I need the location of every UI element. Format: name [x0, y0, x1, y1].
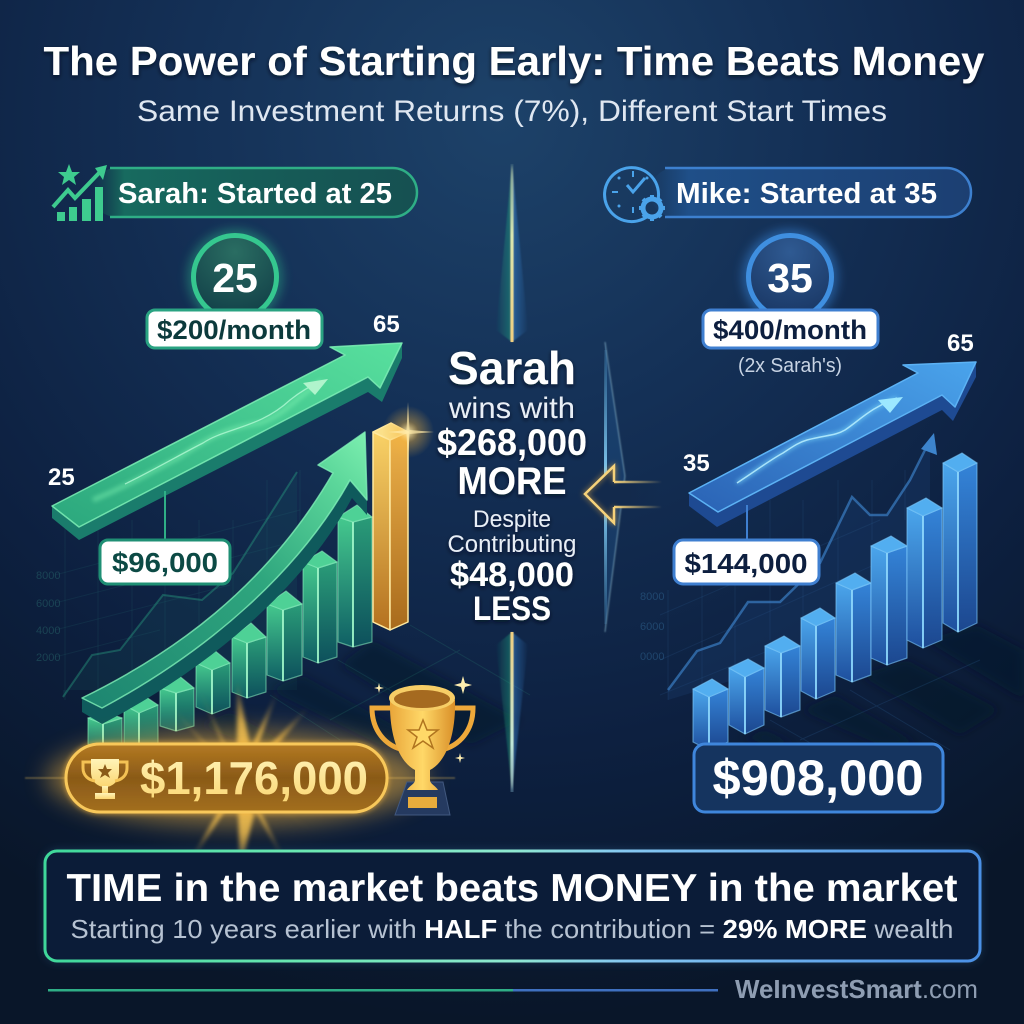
- panel: verdict text: $268,000: [437, 422, 587, 463]
- panel: verdict text: [437, 342, 587, 628]
- age labels on Sarah arrow: [48, 311, 400, 491]
- icon: growth chart with star: [53, 164, 107, 221]
- panel: verdict text: Contributing: [448, 531, 576, 558]
- age labels on Mike arrow: 65: [947, 330, 974, 357]
- panel: verdict text: $48,000: [450, 556, 574, 594]
- Sarah header pill: [92, 168, 417, 217]
- label: $96,000 contributed: [100, 491, 230, 584]
- note: 2x Sarah's: (2x Sarah's): [738, 355, 842, 377]
- label: $200/month: $200/month: [157, 315, 311, 345]
- callout: key takeaway: [45, 851, 980, 961]
- chart: Mike faint line and grid: [640, 433, 937, 700]
- badge: age 25: [187, 229, 283, 325]
- energy wave on green arrow: [93, 379, 328, 500]
- label: $144,000 contributed: [674, 505, 819, 584]
- title: The Power of Starting Early: Time Beats Money: [44, 38, 985, 84]
- icon: clock with gear: [605, 168, 665, 222]
- sunburst: [25, 680, 455, 870]
- gold bar: [373, 423, 408, 630]
- callout: key takeaway: Starting 10 years earlier with HALF the contribution = 29% MORE wealth: [70, 914, 954, 944]
- total: $908,000: $908,000: [712, 750, 924, 806]
- panel: verdict text: wins with: [448, 392, 575, 425]
- label: $96,000 contributed: $96,000: [112, 547, 218, 578]
- chart: Sarah faint line and grid: 4000: [36, 625, 60, 637]
- Mike header pill: [650, 168, 971, 217]
- floor shadow and grid: [740, 625, 1024, 760]
- age labels on Sarah arrow: 65: [373, 311, 400, 338]
- gold bar flare: [382, 402, 434, 462]
- panel: Mike: [605, 168, 1024, 812]
- age labels on Mike arrow: [683, 330, 974, 477]
- label: $144,000 contributed: $144,000: [684, 548, 808, 579]
- chart: Sarah faint line and grid: [36, 470, 300, 700]
- subtitle: Same Investment Returns (7%), Different Start Times: [137, 95, 887, 128]
- bar chart: Sarah's growth bars: [88, 505, 372, 752]
- footer rule: [48, 989, 718, 992]
- label: $200/month: [147, 310, 322, 348]
- badge: age 35: [742, 229, 838, 325]
- chart: Sarah faint line and grid: 2000: [36, 652, 60, 664]
- arrow pointing to Sarah: [585, 342, 662, 632]
- top green arrow: [52, 343, 402, 540]
- label: $400/month: [703, 310, 878, 348]
- icon: small trophy: [83, 759, 127, 799]
- chart: Mike faint line and grid: 0000: [640, 651, 664, 663]
- icon: gold trophy: [372, 676, 473, 815]
- curved green growth arrow: [82, 432, 367, 724]
- chart: Mike faint line and grid: 8000: [640, 591, 664, 603]
- Mike header pill: Mike: Started at 35: [676, 178, 937, 210]
- panel: verdict text: Sarah: [448, 342, 576, 394]
- panel: verdict text: LESS: [473, 590, 551, 628]
- age labels on Sarah arrow: 25: [48, 464, 75, 491]
- total: $908,000: [694, 744, 943, 812]
- badge: age 25: 25: [212, 255, 258, 301]
- divider spikes: [496, 164, 528, 792]
- panel: verdict text: Despite: [473, 506, 551, 533]
- label: $400/month: $400/month: [713, 315, 867, 345]
- age labels on Mike arrow: 35: [683, 450, 710, 477]
- bar chart: Mike's growth bars: [693, 453, 977, 750]
- panel: Sarah: [25, 164, 530, 870]
- chart: Mike faint line and grid: 6000: [640, 621, 664, 633]
- floor shadow and grid: [200, 625, 530, 745]
- top blue arrow: [689, 362, 976, 527]
- Sarah header pill: Sarah: Started at 25: [118, 178, 392, 210]
- brand: WeInvestSmart.com: WeInvestSmart.com: [735, 974, 978, 1004]
- chart: Sarah faint line and grid: 6000: [36, 598, 60, 610]
- panel: verdict text: MORE: [458, 460, 566, 503]
- badge: age 35: 35: [767, 255, 813, 301]
- total: $1,176,000: [66, 744, 387, 812]
- energy wave on blue arrow: [737, 397, 903, 483]
- callout: key takeaway: TIME in the market beats MONEY in the market: [66, 867, 958, 910]
- chart: Sarah faint line and grid: 8000: [36, 570, 60, 582]
- total: $1,176,000: $1,176,000: [140, 752, 368, 804]
